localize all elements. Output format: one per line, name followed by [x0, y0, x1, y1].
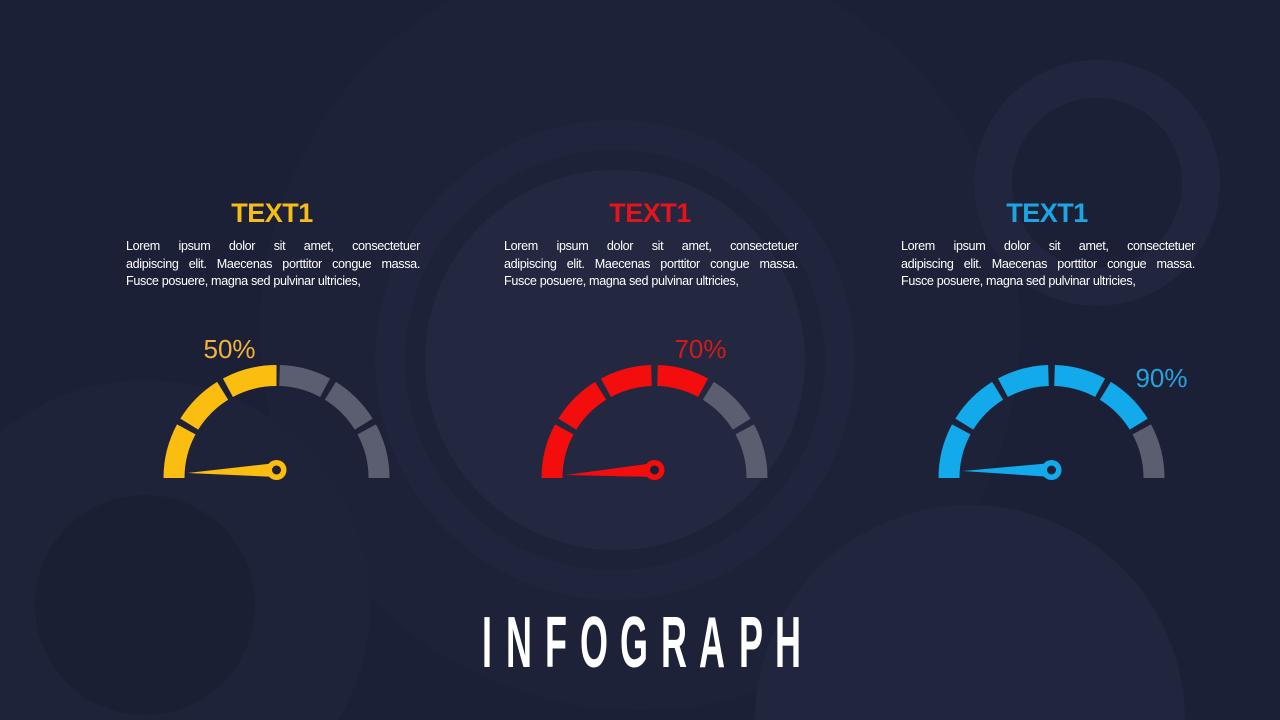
needle: [962, 460, 1062, 480]
label 50%: 50%: [203, 334, 256, 364]
text block 2: Lorem ipsum dolor sit amet, consectetuer: [504, 239, 798, 253]
gauge: blue 90%: [949, 363, 1188, 480]
gauge: red 70%: [552, 334, 757, 480]
gauge: yellow 50%: [174, 334, 379, 480]
title: TEXT1 yellow: TEXT1: [231, 198, 313, 228]
text block 3: Lorem ipsum dolor sit amet, consectetuer: [901, 239, 1195, 253]
text block 3: Fusce posuere, magna sed pulvinar ultricies,: [901, 274, 1136, 288]
text block 1: [126, 239, 420, 288]
label 90%: 90%: [1135, 363, 1188, 393]
title: TEXT1 blue: TEXT1: [1006, 198, 1088, 228]
text block 3: adipiscing elit. Maecenas porttitor congue massa.: [901, 256, 1195, 270]
text block 2: Fusce posuere, magna sed pulvinar ultricies,: [504, 274, 739, 288]
main title INFOGRAPH: INFOGRAPH: [482, 602, 801, 683]
needle: [566, 460, 664, 480]
text block 1: adipiscing elit. Maecenas porttitor congue massa.: [126, 256, 420, 270]
needle: [188, 460, 286, 480]
title: TEXT1 red: TEXT1: [609, 198, 691, 228]
text block 1: Fusce posuere, magna sed pulvinar ultricies,: [126, 274, 361, 288]
text block 1: Lorem ipsum dolor sit amet, consectetuer: [126, 239, 420, 253]
text block 2: [504, 239, 798, 288]
text block 2: adipiscing elit. Maecenas porttitor congue massa.: [504, 256, 798, 270]
text block 3: [901, 239, 1196, 288]
label 70%: 70%: [674, 334, 727, 364]
